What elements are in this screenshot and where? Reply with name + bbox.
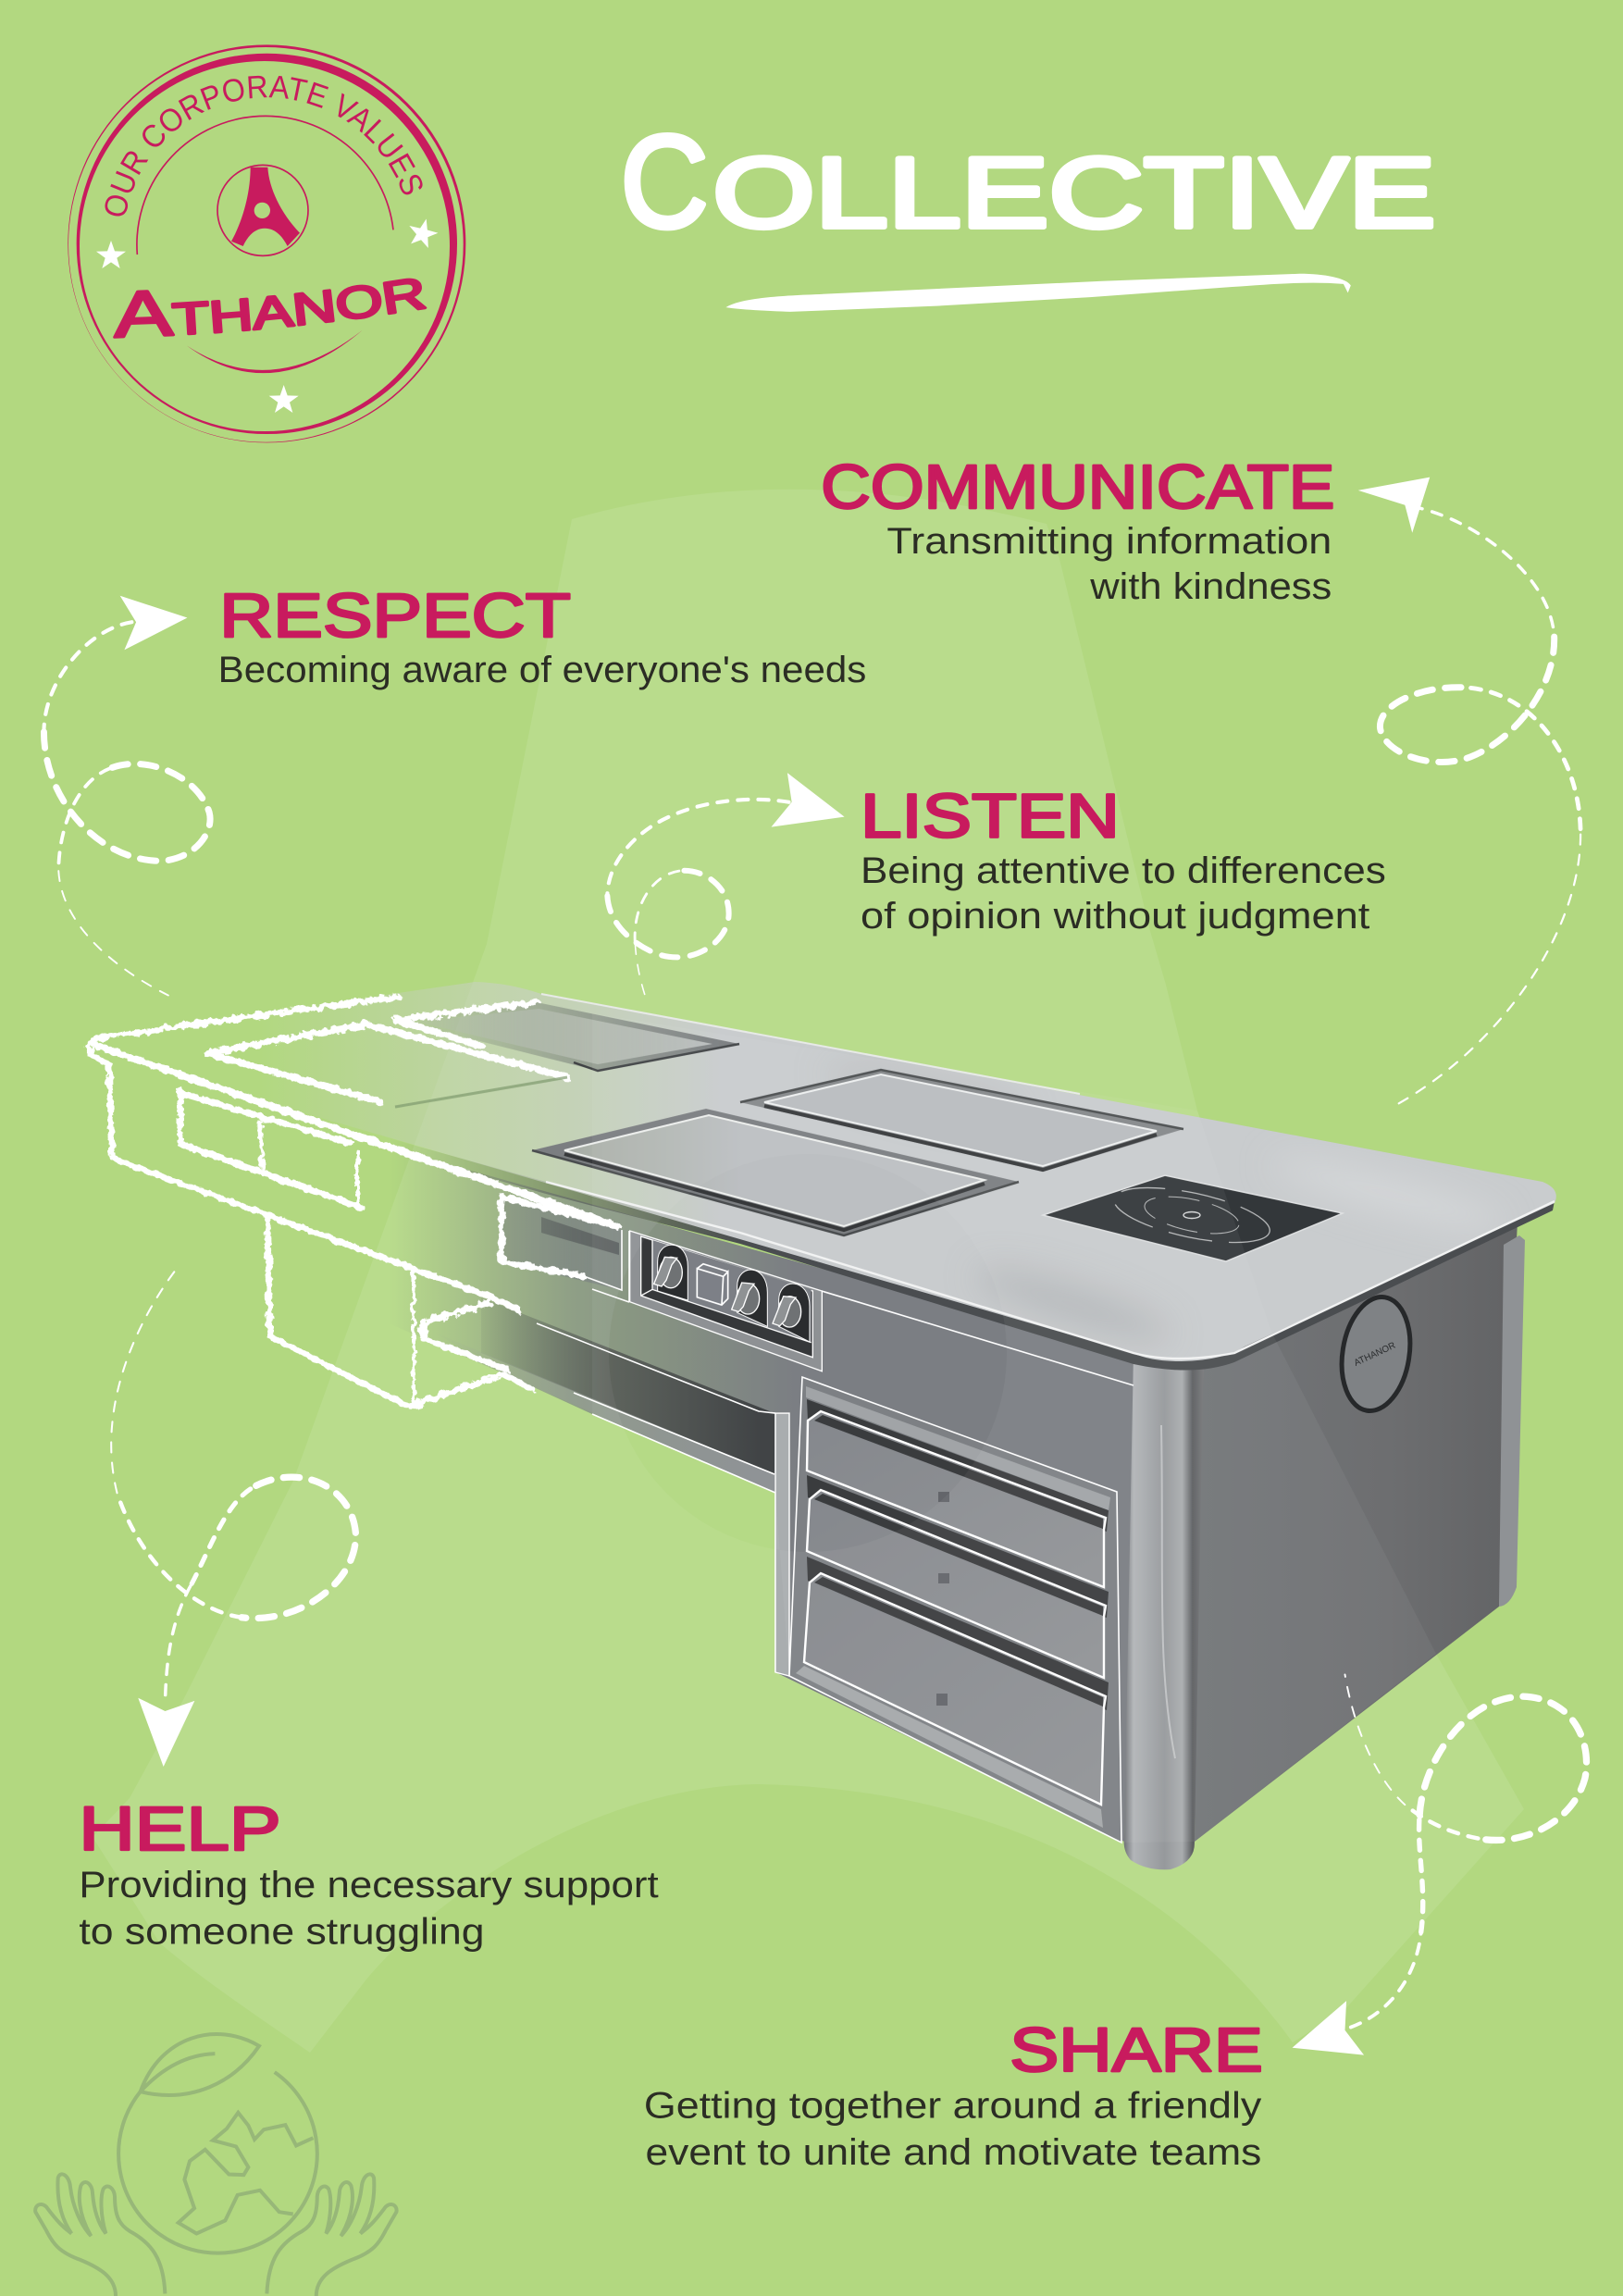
value: communicate: Transmitting information — [886, 521, 1332, 562]
title: OLLECTIVE — [712, 137, 1436, 248]
drawer 3 — [796, 1557, 1109, 1828]
value: share: event to unite and motivate teams — [645, 2132, 1261, 2173]
steel kitchen island — [89, 982, 1556, 1869]
drawer 1 — [807, 1399, 1109, 1587]
dashed arrow: respect — [43, 596, 210, 996]
logo stamp — [68, 44, 466, 442]
background letter A shape — [93, 490, 1524, 2053]
control panel — [630, 1231, 822, 1371]
value: help — [79, 1795, 659, 1952]
rear corner leg — [1499, 1235, 1525, 1607]
value: help: Providing the necessary support — [79, 1865, 659, 1905]
worktop surface — [89, 982, 1556, 1361]
icon: hands holding globe — [35, 2034, 397, 2296]
title: C — [621, 108, 708, 255]
induction hob — [1043, 1175, 1343, 1261]
open recess — [435, 1297, 789, 1676]
value: help: HELP — [79, 1795, 281, 1864]
side emblem: ATHANOR — [1353, 1341, 1397, 1369]
worktop lip — [389, 1138, 1555, 1371]
worktop front edge highlight — [546, 1182, 1555, 1359]
dashed arrow: share — [1293, 1674, 1587, 2055]
logo wordmark: ATHANOR — [113, 278, 427, 339]
value: respect: RESPECT — [219, 582, 571, 651]
value: listen: Being attentive to differences — [861, 850, 1386, 891]
dashed arrow: help — [111, 1266, 355, 1767]
drawer 2 — [807, 1475, 1109, 1678]
griddle plate centre — [532, 1109, 1019, 1235]
controls and drawers detail — [630, 1231, 822, 1371]
surface reflections — [988, 1186, 1412, 1342]
value: share — [644, 2017, 1263, 2173]
value: share: SHARE — [1010, 2017, 1263, 2085]
side emblem — [1334, 1292, 1418, 1416]
griddle plate back left — [395, 1002, 739, 1071]
griddle front left sketch shadow — [395, 1077, 567, 1107]
logo ring text: OUR CORPORATE VALUES — [105, 76, 423, 217]
front corner column — [1124, 1353, 1205, 1869]
knob 3 — [773, 1284, 810, 1342]
value: help: to someone struggling — [79, 1911, 485, 1952]
logo stars — [96, 216, 440, 413]
drawer unit frame — [789, 1377, 1121, 1843]
thin panel lines — [592, 1231, 1134, 1385]
knob 2 — [732, 1270, 767, 1326]
A shape faint overlay on table — [592, 1013, 1436, 1843]
value: listen: LISTEN — [861, 783, 1120, 851]
title — [621, 108, 1436, 255]
dashed arrow: listen — [607, 773, 845, 1001]
rocker switch — [697, 1264, 728, 1305]
value: listen — [861, 783, 1386, 937]
dashed arrow: communicate — [1358, 478, 1580, 1108]
white chalk sketch of table end — [89, 997, 617, 1407]
title brush underline — [725, 274, 1351, 312]
griddle plate back right — [740, 1070, 1183, 1172]
front panel — [389, 1148, 1134, 1842]
knob 1 — [654, 1245, 688, 1300]
value: communicate — [821, 453, 1334, 607]
logo emblem — [217, 165, 308, 255]
value: respect: Becoming aware of everyone's needs — [218, 650, 866, 690]
value: communicate: with kindness — [1089, 566, 1332, 607]
side panel — [1195, 1222, 1518, 1842]
value: share: Getting together around a friendly — [644, 2086, 1262, 2127]
value: listen: of opinion without judgment — [861, 896, 1369, 937]
left drawer fade section — [502, 1197, 622, 1290]
value: communicate: COMMUNICATE — [821, 453, 1334, 522]
value: respect — [218, 582, 866, 690]
